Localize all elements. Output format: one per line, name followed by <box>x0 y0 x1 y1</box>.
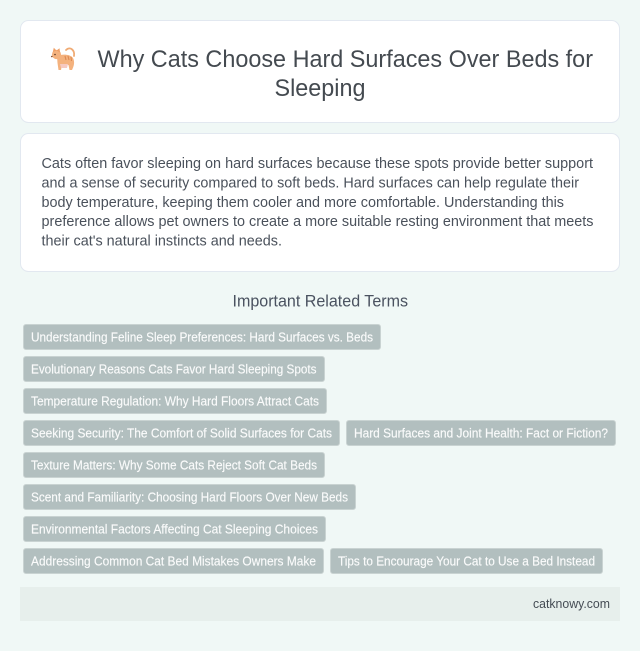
tag list <box>24 324 616 574</box>
tag: temperature regulation: Temperature Regulation: Why Hard Floors Attract Cats <box>31 394 319 408</box>
tag: evolutionary reasons <box>24 356 324 382</box>
description text: their cat's natural instincts and needs. <box>42 234 282 250</box>
title: Sleeping <box>274 75 366 102</box>
tag: seeking security: Seeking Security: The Comfort of Solid Surfaces for Cats <box>31 426 332 440</box>
tag: temperature regulation <box>24 388 326 414</box>
footer bar <box>20 587 620 621</box>
tag: seeking security <box>24 420 340 446</box>
description text: preference allows pet owners to create a more suitable resting environment that meets <box>42 214 594 230</box>
tag: joint health: Hard Surfaces and Joint Health: Fact or Fiction? <box>354 426 608 440</box>
panel: title card <box>20 20 620 122</box>
description text: body temperature, keeping them cooler and more comfortable. Understanding this <box>42 195 564 211</box>
tag: texture matters <box>24 452 324 478</box>
tag: scent and familiarity <box>24 484 356 510</box>
tag: tips <box>330 548 602 574</box>
description text <box>42 156 594 250</box>
panel: description card <box>20 134 620 272</box>
heading: related terms: Important Related Terms <box>232 292 408 310</box>
tag: scent and familiarity: Scent and Familiarity: Choosing Hard Floors Over New Beds <box>31 490 348 504</box>
tag: evolutionary reasons: Evolutionary Reasons Cats Favor Hard Sleeping Spots <box>31 362 316 376</box>
footer source text: catknowy.com <box>533 596 610 611</box>
tag: texture matters: Texture Matters: Why Some Cats Reject Soft Cat Beds <box>31 458 317 472</box>
tag: understanding preferences: Understanding Feline Sleep Preferences: Hard Surfaces vs. Beds <box>31 330 373 344</box>
title <box>98 46 593 102</box>
tag: understanding preferences <box>24 324 380 350</box>
tag: common mistakes: Addressing Common Cat Bed Mistakes Owners Make <box>31 554 316 568</box>
icon: orange cat <box>51 48 74 70</box>
title: Why Cats Choose Hard Surfaces Over Beds for <box>98 46 593 73</box>
tag: environmental factors <box>24 516 326 542</box>
tag: common mistakes <box>24 548 324 574</box>
description text: and a sense of security compared to soft beds. Hard surfaces can help regulate their <box>42 175 579 191</box>
tag: tips: Tips to Encourage Your Cat to Use a Bed Instead <box>338 554 595 568</box>
tag: joint health <box>346 420 616 446</box>
tag: environmental factors: Environmental Factors Affecting Cat Sleeping Choices <box>31 522 318 536</box>
description text: Cats often favor sleeping on hard surfaces because these spots provide better support <box>42 156 593 172</box>
